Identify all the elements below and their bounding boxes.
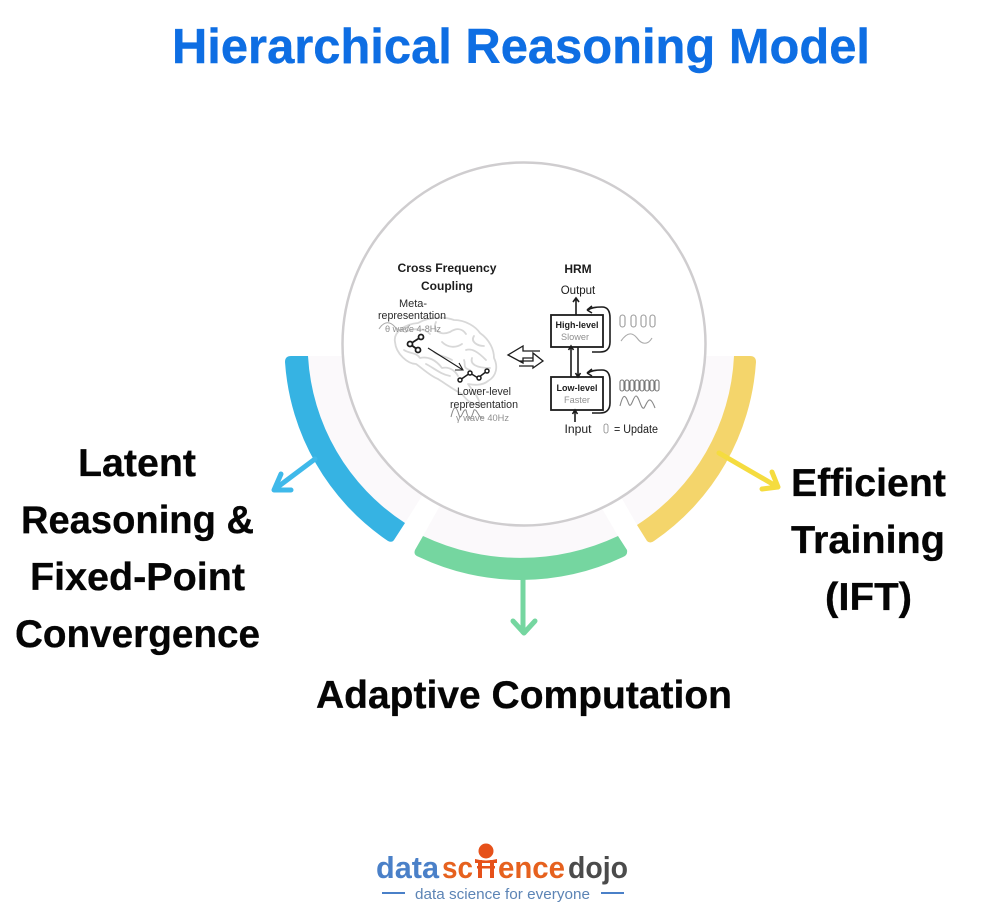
- logo wordmark: sc: [442, 850, 473, 885]
- lower-level label: representation: [450, 399, 518, 411]
- label: latent reasoning: Fixed-Point: [30, 556, 245, 599]
- logo wordmark: data: [376, 850, 440, 885]
- meta-representation label: [378, 298, 446, 322]
- label: efficient training: Training: [791, 519, 945, 562]
- cross frequency heading: [398, 261, 497, 293]
- low-level box: Low-level: [556, 383, 598, 394]
- logo torii icon: [475, 844, 497, 878]
- gamma wave label: γ wave 40Hz: [456, 413, 509, 424]
- arrow: green: [513, 580, 535, 633]
- low-level box: Faster: [564, 395, 590, 406]
- brain diagram: [378, 261, 518, 424]
- logo wordmark: ence: [498, 850, 565, 885]
- arrow: blue: [274, 459, 315, 490]
- connectors and feedback loops: [568, 298, 610, 422]
- high-level box: Slower: [561, 332, 589, 343]
- label: adaptive computation: Adaptive Computation: [316, 674, 732, 717]
- cross frequency heading: Coupling: [421, 279, 473, 293]
- label: latent reasoning: Latent: [78, 442, 196, 485]
- arrow: yellow: [719, 453, 778, 489]
- label: latent reasoning: Convergence: [15, 613, 260, 656]
- low-level box: [551, 377, 603, 410]
- double arrow: [508, 346, 543, 368]
- label: efficient training: (IFT): [825, 576, 912, 619]
- update legend: = Update: [614, 424, 658, 436]
- HRM diagram: [551, 262, 659, 436]
- high-level wave: [621, 334, 652, 343]
- central circle: [342, 162, 706, 526]
- logo wordmark: dojo: [568, 850, 628, 885]
- arrow: meta to lower: [428, 348, 463, 370]
- logo wordmark: [376, 850, 628, 885]
- output label: Output: [561, 285, 596, 297]
- input label: Input: [564, 424, 592, 436]
- lower-level label: Lower-level: [457, 386, 511, 398]
- title: Hierarchical Reasoning Model: [172, 20, 870, 74]
- meta-representation label: Meta-: [399, 298, 427, 310]
- arc: green: [414, 536, 627, 580]
- arc: blue: [285, 356, 405, 542]
- high-level box: High-level: [556, 320, 598, 331]
- meta-representation label: representation: [378, 310, 446, 322]
- theta wave label: θ wave 4-8Hz: [385, 324, 441, 335]
- logo tagline rules: [382, 892, 624, 894]
- high-level update capsules: [620, 315, 655, 327]
- faint inner bands: [308, 356, 734, 558]
- label: latent reasoning: [15, 442, 260, 656]
- low-level update capsules: [620, 380, 659, 391]
- logo tagline: data science for everyone: [415, 886, 590, 903]
- logo: [376, 844, 628, 903]
- icon: chain nodes: [458, 369, 489, 382]
- brain illustration: [395, 318, 496, 405]
- theta wave: [379, 323, 410, 330]
- icon: share nodes: [408, 334, 424, 352]
- arc: yellow: [637, 356, 756, 542]
- label: efficient training: [791, 462, 946, 619]
- label: latent reasoning: Reasoning &: [21, 499, 254, 542]
- HRM heading: HRM: [564, 262, 592, 276]
- cross frequency heading: Cross Frequency: [398, 261, 497, 275]
- label: efficient training: Efficient: [791, 462, 946, 505]
- lower-level label: [450, 386, 518, 411]
- gamma wave: [451, 408, 484, 418]
- high-level box: [551, 315, 603, 347]
- low-level wave: [620, 396, 655, 408]
